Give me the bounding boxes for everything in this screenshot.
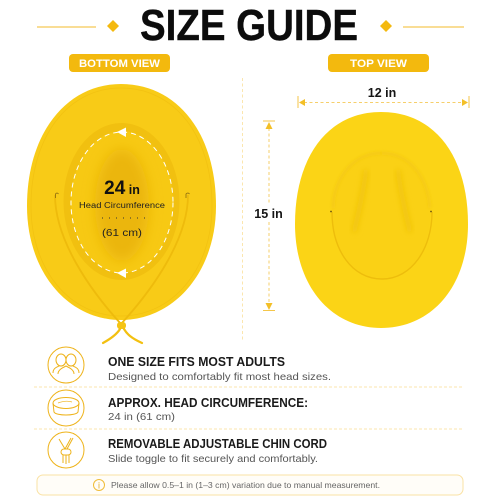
title <box>37 1 464 50</box>
heading: top view <box>328 54 429 72</box>
heading: top view: TOP VIEW <box>350 58 408 70</box>
row: one size <box>48 347 331 383</box>
icon: tape measure <box>48 390 84 426</box>
dimension: 12 in width: 12 in <box>368 86 396 100</box>
crown hollow <box>95 149 149 261</box>
dimension: 15 in height <box>254 121 283 310</box>
dimension: 15 in height: 15 in <box>254 207 283 221</box>
row: chin cord <box>48 432 327 468</box>
chin cord <box>55 195 188 324</box>
row: head circumference: 24 in (61 cm) <box>108 411 175 423</box>
measurement text: head circumference: Head Circumference <box>79 201 166 210</box>
note box <box>37 475 463 495</box>
measurement text: head circumference <box>79 178 166 239</box>
measurement text: head circumference: (61 cm) <box>102 228 142 239</box>
heading: bottom view <box>69 54 170 72</box>
row: chin cord: Slide toggle to fit securely and comfortably. <box>108 453 318 465</box>
hat: bottom view <box>27 84 216 343</box>
icon: cord toggle <box>48 432 84 468</box>
row: head circumference: APPROX. HEAD CIRCUMFERENCE: <box>108 396 308 410</box>
title: SIZE GUIDE <box>140 1 358 50</box>
row: one size: ONE SIZE FITS MOST ADULTS <box>108 355 285 369</box>
hat: top view <box>295 112 468 328</box>
note box: Please allow 0.5–1 in (1–3 cm) variation due to manual measurement. <box>111 480 380 490</box>
head circumference dashed line <box>71 132 173 273</box>
hat band <box>332 212 432 279</box>
inner band <box>64 123 180 280</box>
divider <box>242 78 244 340</box>
dimension: 12 in width <box>298 86 469 108</box>
icon: info: i <box>98 480 100 490</box>
row: chin cord: REMOVABLE ADJUSTABLE CHIN CORD <box>108 437 327 451</box>
crown <box>332 152 430 278</box>
icon: people <box>48 347 84 383</box>
crown pinch <box>354 170 366 232</box>
heading: bottom view: BOTTOM VIEW <box>79 58 161 70</box>
circumference arrows <box>117 128 126 137</box>
row: head circumference <box>48 390 308 426</box>
measurement text: head circumference: 24 in <box>104 178 140 199</box>
icon: info <box>94 480 104 490</box>
row: one size: Designed to comfortably fit most head sizes. <box>108 371 331 383</box>
